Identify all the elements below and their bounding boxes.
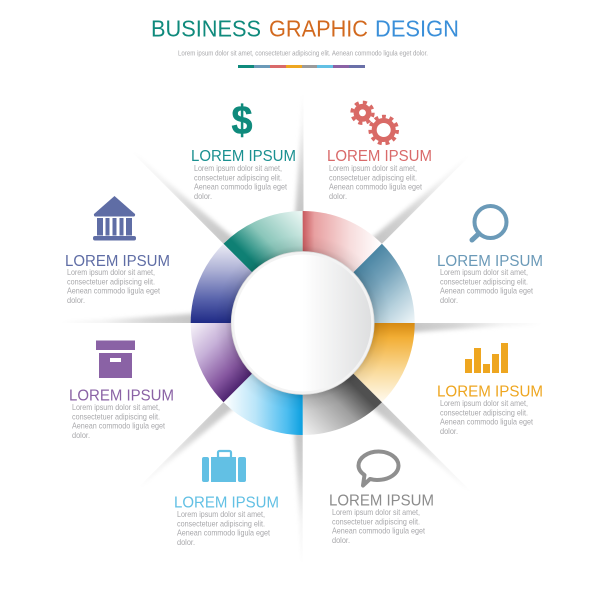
title: DESIGN — [375, 15, 459, 41]
panel: purple text: consectetuer adipiscing elit. — [72, 412, 160, 421]
title: GRAPHIC — [269, 15, 368, 41]
panel: orange text: Aenean commodo ligula eget — [440, 418, 534, 427]
panel: orange text: consectetuer adipiscing elit. — [440, 408, 528, 417]
icon: speech bubble — [358, 452, 398, 486]
panel: blue text: Aenean commodo ligula eget — [440, 287, 534, 296]
panel: red text: consectetuer adipiscing elit. — [329, 173, 417, 182]
panel: blue text: Lorem ipsum dolor sit amet, — [440, 268, 528, 277]
panel: navy text: Lorem ipsum dolor sit amet, — [67, 268, 155, 277]
panel: light blue text: Aenean commodo ligula eget — [177, 529, 271, 538]
panel: light blue text: LOREM IPSUM — [174, 495, 279, 512]
fold shadows — [94, 118, 509, 528]
ring chart — [191, 211, 415, 435]
icon: bank — [93, 196, 136, 240]
panel: blue text — [437, 253, 543, 305]
colour bar — [238, 65, 365, 68]
panel: orange text: dolor. — [440, 427, 458, 436]
icon: dollar: $ — [232, 98, 253, 143]
panel: grey text: LOREM IPSUM — [329, 493, 434, 510]
panel: red text — [327, 148, 432, 201]
panel: teal text: dolor. — [194, 192, 212, 201]
icon: magnifier — [472, 206, 506, 240]
panel: light blue text: dolor. — [177, 538, 195, 547]
icon: briefcase — [202, 451, 246, 482]
panel: navy text: Aenean commodo ligula eget — [67, 287, 161, 296]
panel: light blue text — [174, 495, 279, 547]
panel: navy text — [65, 253, 170, 305]
icon: box — [96, 340, 135, 378]
panel: teal text: Aenean commodo ligula eget — [194, 183, 288, 192]
panel: navy text: LOREM IPSUM — [65, 253, 170, 270]
icon: bar chart — [465, 343, 508, 373]
panel: red text: LOREM IPSUM — [327, 148, 432, 165]
panel: red text: dolor. — [329, 192, 347, 201]
icon: gears — [352, 102, 397, 144]
panel: purple text: Lorem ipsum dolor sit amet, — [72, 403, 160, 412]
panel: grey text: dolor. — [332, 536, 350, 545]
panel: purple text: dolor. — [72, 431, 90, 440]
title: BUSINESS — [151, 15, 261, 41]
panel: orange text — [437, 384, 543, 436]
panel: orange text: Lorem ipsum dolor sit amet, — [440, 399, 528, 408]
subtitle: Lorem ipsum dolor sit amet, consectetuer adipiscing elit. Aenean commodo ligula eget dolor. — [178, 51, 428, 58]
centre disc — [231, 252, 374, 394]
panel: blue text: consectetuer adipiscing elit. — [440, 277, 528, 286]
panel: purple text — [69, 388, 174, 440]
panel: purple text: LOREM IPSUM — [69, 388, 174, 405]
panel: orange text: LOREM IPSUM — [437, 384, 543, 401]
panel: blue text: dolor. — [440, 296, 458, 305]
panel: red text: Aenean commodo ligula eget — [329, 183, 423, 192]
panel: blue text: LOREM IPSUM — [437, 253, 543, 270]
panel: grey text — [329, 493, 434, 545]
panel: teal text — [191, 148, 296, 201]
panel: purple text: Aenean commodo ligula eget — [72, 422, 166, 431]
panel: grey text: consectetuer adipiscing elit. — [332, 517, 420, 526]
title — [151, 15, 459, 41]
panel: grey text: Aenean commodo ligula eget — [332, 527, 426, 536]
panel: red text: Lorem ipsum dolor sit amet, — [329, 164, 417, 173]
panel: grey text: Lorem ipsum dolor sit amet, — [332, 508, 420, 517]
panel: teal text: LOREM IPSUM — [191, 148, 296, 165]
panel: teal text: Lorem ipsum dolor sit amet, — [194, 164, 282, 173]
panel: navy text: dolor. — [67, 296, 85, 305]
panel: light blue text: Lorem ipsum dolor sit amet, — [177, 510, 265, 519]
panel: light blue text: consectetuer adipiscing elit. — [177, 519, 265, 528]
panel: navy text: consectetuer adipiscing elit. — [67, 277, 155, 286]
panel: teal text: consectetuer adipiscing elit. — [194, 173, 282, 182]
